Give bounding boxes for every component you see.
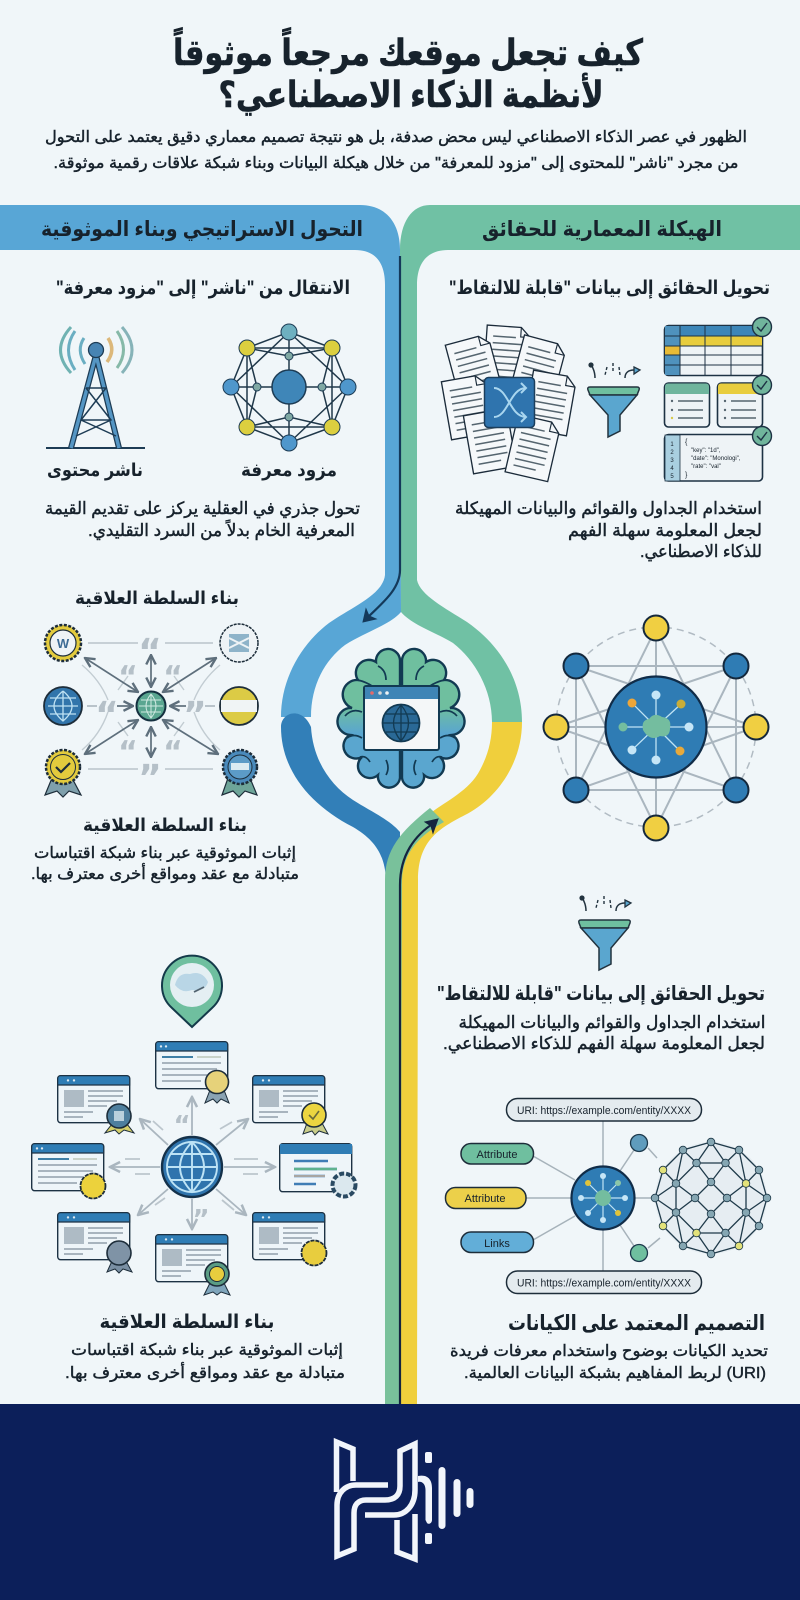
text: entity definition — [450, 1343, 768, 1383]
arrow: lower flow — [400, 823, 434, 1404]
heading: shift to knowledge provider: الانتقال من "ناشر" إلى "مزود معرفة" — [56, 278, 350, 299]
pill: attribute yellow — [446, 1188, 526, 1208]
badge: W seal: W — [57, 636, 70, 651]
pill: attribute yellow: Attribute — [465, 1193, 505, 1205]
text: entity definition: تحديد الكيانات بوضوح واستخدام معرفات فريدة — [450, 1343, 768, 1361]
diagram: citation network: “ — [118, 735, 138, 770]
text: tables and lists: لجعل المعلومة سهلة الفهم — [568, 521, 762, 541]
icon: structured tables and code: "date": "Monologi", — [691, 456, 741, 462]
text: proving authority — [31, 845, 299, 884]
hub node — [572, 1166, 634, 1230]
pill: links: Links — [484, 1238, 510, 1250]
central flow ribbons — [0, 205, 800, 1404]
label: knowledge provider: مزود معرفة — [241, 460, 337, 481]
footer band — [0, 1404, 800, 1600]
title: كيف تجعل موقعك مرجعاً موثوقاً — [173, 27, 643, 74]
diagram: citation network: “ — [95, 695, 119, 736]
diagram: authority hub and websites: ” — [192, 1205, 210, 1235]
diagram: citation network: “ — [138, 632, 162, 673]
small nodes — [630, 1134, 648, 1262]
icon: AI brain with web window — [337, 649, 465, 788]
text: proving authority lower: إثبات الموثوقية عبر بناء شبكة اقتباسات — [71, 1342, 343, 1360]
badge: yellow band — [220, 687, 258, 725]
text: proving authority: إثبات الموثوقية عبر بناء شبكة اقتباسات — [34, 845, 296, 863]
website card: lower right — [253, 1213, 326, 1266]
heading: left column: التحول الاستراتيجي وبناء الموثوقية — [41, 218, 363, 241]
icon: location pin — [162, 956, 222, 1027]
badge: W seal — [45, 625, 81, 661]
icon: structured tables and code: 3 — [670, 458, 674, 464]
title: لأنظمة الذكاء الاصطناعي؟ — [218, 72, 604, 116]
website card: bottom — [156, 1235, 230, 1295]
website card: left — [32, 1144, 106, 1198]
diagram: citation network — [44, 624, 258, 799]
diagram: citation network: ” — [138, 758, 162, 799]
hub globe — [136, 692, 166, 720]
icon: structured tables and code: 1 — [670, 442, 674, 448]
ribbon: green header and upper right band — [400, 205, 800, 722]
badge: laurel seal — [220, 624, 258, 662]
icon: knowledge graph sphere — [651, 1138, 771, 1258]
heading: relational authority lower: بناء السلطة العلاقية — [100, 1312, 274, 1333]
pill: URI top — [506, 1098, 702, 1121]
intro text: من مجرد "ناشر" للمحتوى إلى "مزود للمعرفة" من خلال هيكلة البيانات وبناء شبكة علاقات رقمية موثوقة. — [54, 155, 739, 173]
badge: check ribbon — [45, 750, 81, 797]
heading: relational authority repeat: بناء السلطة العلاقية — [83, 815, 247, 835]
diagram: citation network: “ — [118, 660, 138, 695]
pill: URI bottom — [506, 1271, 702, 1294]
icon: structured tables and code: "rate": "val" — [691, 464, 721, 470]
badge: globe — [44, 687, 82, 725]
arrowhead: lower — [425, 819, 438, 833]
text: tables and lists: للذكاء الاصطناعي. — [640, 542, 762, 562]
pill: attribute green: Attribute — [477, 1149, 517, 1161]
icon: scattered documents with shuffle — [441, 325, 577, 482]
logo — [336, 1442, 474, 1559]
icon: structured tables and code: { — [685, 439, 688, 446]
icon: broadcast tower — [46, 327, 145, 448]
ribbon: dark blue lower left band — [281, 713, 400, 880]
website card: lower left — [58, 1213, 132, 1273]
diagram: authority hub and websites: “ — [173, 1111, 191, 1141]
diagram: entity graph — [446, 1098, 771, 1294]
diagram: citation network: “ — [163, 735, 183, 770]
ribbon: yellow lower right band — [400, 722, 522, 1404]
text: proving authority: متبادلة مع عقد ومواقع أخرى معترف بها. — [31, 863, 299, 884]
pill: attribute green — [461, 1144, 534, 1164]
hub globe — [162, 1137, 222, 1197]
label: content publisher: ناشر محتوى — [47, 460, 143, 481]
icon: structured tables and code: "key": "1d", — [691, 448, 721, 454]
text: mindset shift: المعرفية الخام بدلاً من السرد التقليدي. — [88, 519, 355, 541]
diagram: citation network: “ — [163, 660, 183, 695]
pill: links — [461, 1232, 534, 1252]
website card: top — [156, 1042, 229, 1103]
diagram: entity mesh network — [544, 616, 768, 840]
text: mindset shift: تحول جذري في العقلية يركز على تقديم القيمة — [45, 499, 360, 519]
intro text — [45, 129, 747, 173]
icon: knowledge network — [223, 324, 356, 451]
text: proving authority lower: متبادلة مع عقد ومواقع أخرى معترف بها. — [65, 1362, 345, 1383]
ribbon: green lower strip — [385, 808, 444, 1404]
text: tables and lists — [455, 499, 762, 562]
diagram: authority hub and websites — [32, 1042, 355, 1295]
icon: structured tables and code: 2 — [670, 450, 674, 456]
text: entity definition: (URI) لربط المفاهيم بشبكة البيانات العالمية. — [464, 1365, 766, 1383]
badge: blue ribbon — [222, 750, 257, 797]
icon: filter funnel — [588, 362, 640, 437]
icon: structured tables and code: 5 — [670, 474, 674, 480]
text: tables lower: لجعل المعلومة سهلة الفهم للذكاء الاصطناعي. — [443, 1034, 765, 1054]
icon: structured tables and code: } — [685, 472, 688, 479]
text: tables lower — [443, 1013, 766, 1054]
heading: right column: الهيكلة المعمارية للحقائق — [482, 218, 722, 241]
arrowhead: upper — [363, 609, 376, 622]
website card: upper right — [253, 1076, 328, 1135]
heading: relational authority: بناء السلطة العلاقية — [75, 588, 239, 608]
text: tables and lists: استخدام الجداول والقوائم والبيانات المهيكلة — [455, 499, 762, 519]
pill: URI top: URI: https://example.com/entity/XXXX — [517, 1105, 692, 1117]
icon: structured tables and code: 4 — [670, 466, 674, 472]
ribbon: blue header and upper left band — [0, 205, 401, 717]
pill: URI bottom: URI: https://example.com/entity/XXXX — [517, 1278, 692, 1290]
website card: upper left — [58, 1076, 134, 1134]
icon: structured tables and code — [664, 318, 772, 481]
text: tables lower: استخدام الجداول والقوائم والبيانات المهيكلة — [458, 1013, 766, 1033]
website card: right — [280, 1144, 356, 1196]
text: mindset shift — [45, 499, 360, 541]
intro text: الظهور في عصر الذكاء الاصطناعي ليس محض صدفة، بل هو نتيجة تصميم معماري دقيق يعتمد على التحول — [45, 129, 747, 147]
icon: filter funnel lower — [579, 895, 631, 970]
title — [173, 27, 643, 116]
diagram: citation network: ” — [183, 695, 207, 736]
text: proving authority lower — [65, 1342, 345, 1383]
arrow: upper flow — [366, 256, 400, 619]
